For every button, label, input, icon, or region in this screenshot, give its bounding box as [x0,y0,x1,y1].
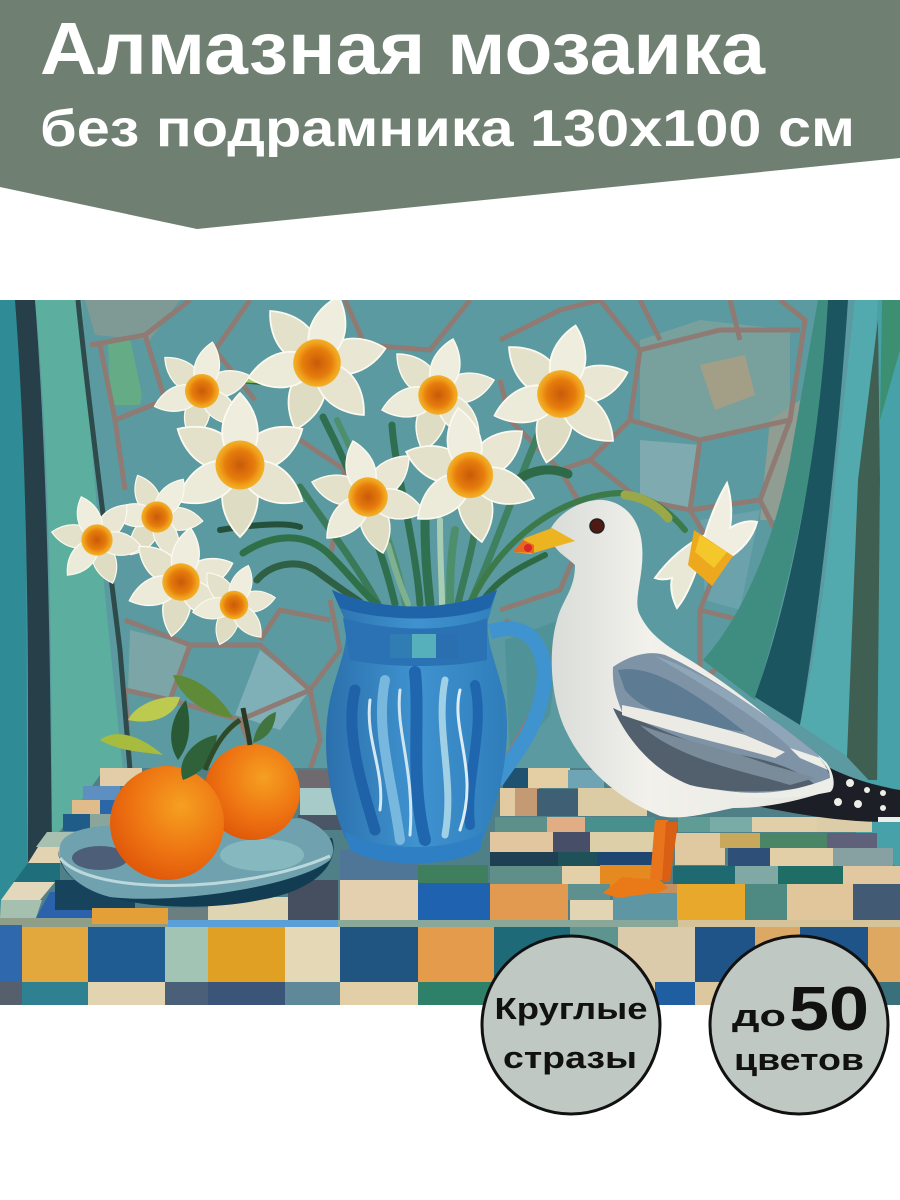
subtitle: без подрамника 130х100 см [40,100,855,158]
blue jug [326,590,544,864]
header banner [0,0,900,229]
daffodils [51,300,629,646]
gull legs [603,820,678,898]
seagull [513,500,900,898]
painting: still life with seagull [0,275,900,1005]
mosaic wall [26,300,880,864]
badge: up to 50 colours: до [732,998,786,1033]
gull body [550,500,832,817]
jug handle [490,629,544,782]
gull tail [759,766,900,822]
checkered table [0,768,900,1005]
table top rows [0,768,900,927]
badge: round rhinestones [482,936,660,1114]
plate [58,818,334,907]
badge: round rhinestones: стразы [503,1040,637,1075]
right drooping daffodil [655,483,757,608]
jug body [326,590,507,860]
right curtain [703,300,900,890]
badge: up to 50 colours: 50 [789,975,869,1044]
tail spots [834,779,900,822]
badge: up to 50 colours: цветов [734,1042,864,1077]
gull wing [613,653,834,798]
badge: up to 50 colours [710,936,888,1114]
gull eye [590,519,604,533]
table front rows [0,925,900,1005]
stems [220,378,685,604]
badge: round rhinestones: Круглые [494,991,648,1026]
title: Алмазная мозаика [40,7,766,90]
oranges and leaves [100,675,300,880]
jug pattern [352,672,478,840]
left curtain [0,300,130,925]
gull beak [513,528,575,554]
